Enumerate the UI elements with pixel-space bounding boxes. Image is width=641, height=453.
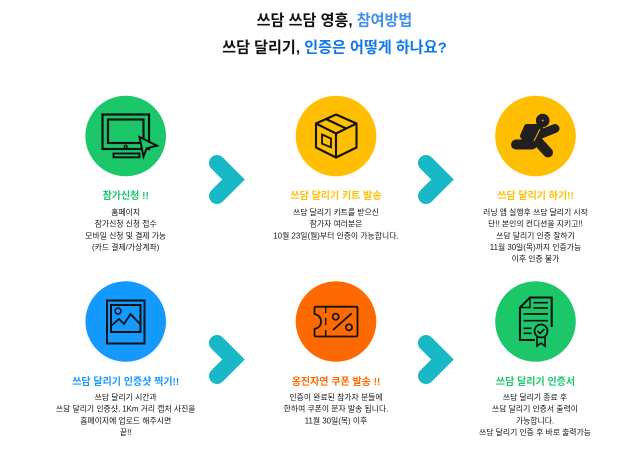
- text block: 쓰담 달리기 시간과: [95, 392, 157, 402]
- text block: 한하여 쿠폰이 문자 발송 됩니다.: [284, 404, 388, 414]
- arrow: [426, 163, 442, 196]
- text block: [85, 207, 166, 252]
- text block: [56, 392, 196, 437]
- text block: 홈페이지: [111, 207, 140, 217]
- icon: picture frame: [85, 281, 166, 362]
- text block: (카드 결제/가상계좌): [92, 242, 160, 252]
- text block: 가능합니다.: [516, 416, 554, 426]
- text block: [273, 207, 399, 240]
- text block: 참가자 여러분은: [310, 218, 362, 228]
- icon: discount coupon: [296, 281, 376, 362]
- text block: 쓰담 달리기 키트를 받으신: [293, 207, 379, 217]
- text block: 쓰담 달리기 인증 후 바로 출력가능: [479, 427, 591, 437]
- text block: [479, 392, 591, 437]
- text block: 인증이 완료된 참가자 분들에: [289, 392, 383, 402]
- text block: 10월 23일(월)부터 인증이 가능합니다.: [273, 230, 399, 240]
- text block: 참가신청 신청 접수: [95, 218, 157, 228]
- heading: 참가신청 !!: [103, 189, 149, 202]
- heading: 쓰담 달리기 인증서: [496, 375, 575, 388]
- title: [222, 12, 447, 56]
- arrow: [217, 163, 234, 196]
- icon: certificate document: [495, 281, 576, 362]
- heading: 쓰담 달리기 하기!!: [497, 189, 574, 202]
- panel: step 1 sign up: [85, 96, 166, 252]
- icon: computer monitor with cursor: [85, 96, 166, 176]
- text block: 쓰담 달리기 인증서 출력이: [492, 404, 578, 414]
- text block: 이후 인증 불가: [512, 254, 559, 264]
- text block: [284, 392, 388, 426]
- text block: 모바일 신청 및 결제 가능: [85, 230, 166, 240]
- text block: 쓰담 달리기 인증샷, 1Km 거리 캡처 사진을: [56, 404, 196, 414]
- text block: 11월 30일(목) 이후: [305, 416, 367, 426]
- title: 쓰담 쓰담 영흥, 참여방법: [257, 12, 412, 30]
- panel: step 2 kit delivery: [273, 96, 399, 240]
- text block: 홈페이지에 업로드 해주시면: [80, 416, 171, 426]
- text block: 쓰담 달리기 종료 후: [503, 392, 567, 402]
- heading: 옹진자연 쿠폰 발송 !!: [292, 375, 380, 388]
- panel: step 5 coupon: [284, 281, 388, 426]
- panel: step 6 certificate: [479, 281, 591, 437]
- heading: 쓰담 달리기 인증샷 찍기!!: [72, 375, 179, 388]
- arrow: [426, 343, 442, 376]
- text block: 단!! 본인의 컨디션을 지키고!!: [488, 218, 583, 228]
- icon: runner: [495, 96, 576, 176]
- text block: 쓰담 달리기 인증 잘하기: [496, 230, 575, 240]
- text block: 11월 30일(목)까지 인증가능: [490, 242, 581, 252]
- text block: 러닝 앱 실행후 쓰담 달리기 시작: [483, 207, 588, 217]
- title: 쓰담 달리기, 인증은 어떻게 하나요?: [222, 40, 447, 56]
- text block: [483, 207, 588, 264]
- panel: step 4 photo: [56, 281, 196, 437]
- icon: parcel box: [296, 96, 376, 176]
- text block: 끝!!: [120, 428, 131, 437]
- panel: step 3 run: [483, 96, 588, 264]
- heading: 쓰담 달리기 키트 발송: [290, 189, 382, 202]
- arrow: [217, 343, 234, 376]
